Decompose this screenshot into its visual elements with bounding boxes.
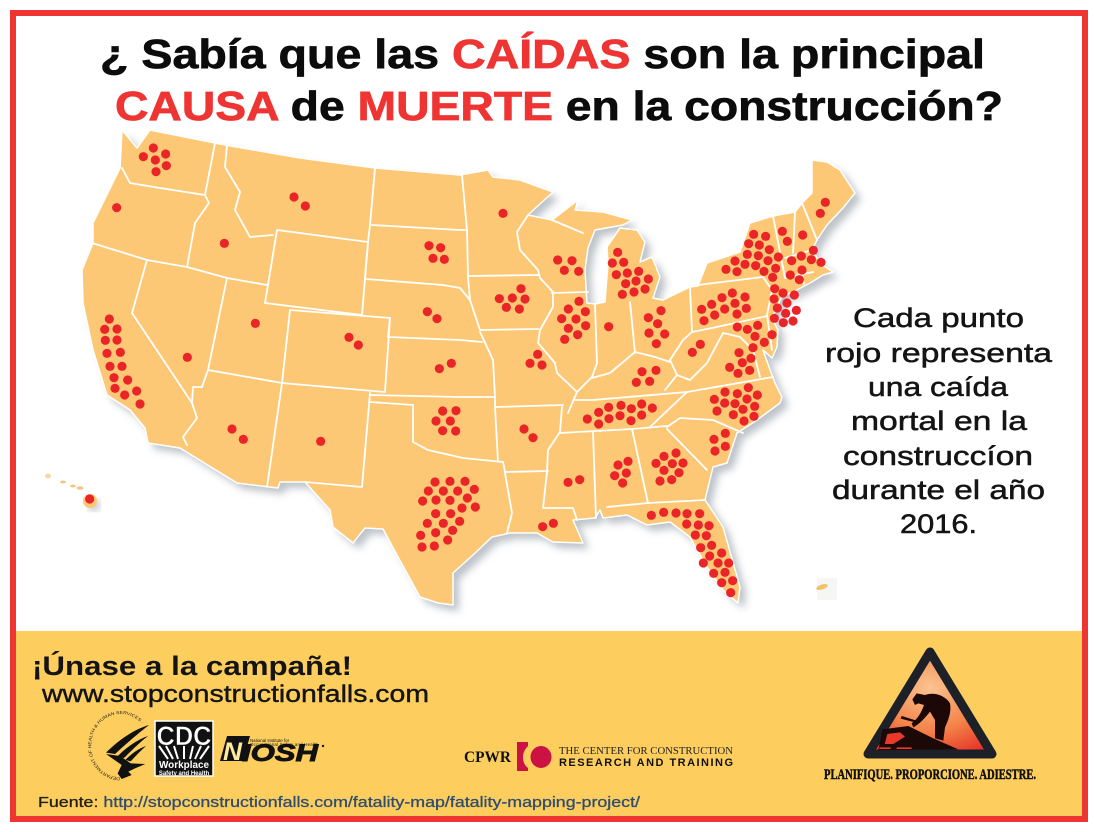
title: ¿ Sabía que las CAÍDAS son la principal [100, 31, 985, 77]
state borders [92, 143, 817, 533]
logo: CDC Workplace Safety and Health: CDC [156, 721, 212, 751]
explanatory text block: rojo representa [825, 338, 1053, 368]
Puerto Rico [816, 578, 837, 600]
icon: warning triangle with worker [868, 652, 992, 754]
title: CAUSA de MUERTE en la construcción? [115, 83, 1003, 129]
explanatory text block: mortal en la [851, 406, 1028, 436]
panel: US map [45, 130, 861, 611]
explanatory text block [825, 303, 1053, 539]
logo: CPWR: THE CENTER FOR CONSTRUCTION [559, 745, 733, 757]
logo: CPWR [464, 742, 733, 771]
source line: Fuente: http://stopconstructionfalls.com/fatality-map/fatality-mapping-project/ [38, 794, 641, 811]
explanatory text block: una caída [868, 372, 1009, 402]
campaign heading: ¡Únase a la campaña! [32, 650, 352, 681]
logo: NIOSH: National Institute for [250, 738, 290, 743]
title [100, 31, 1003, 129]
logo: CPWR: CPWR [464, 749, 511, 766]
fatality dots: west [100, 143, 456, 409]
explanatory text block: Cada punto [853, 303, 1024, 333]
campaign website: www.stopconstructionfalls.com [41, 681, 429, 708]
logo: NIOSH: Occupational Safety and Health [250, 742, 319, 747]
explanatory text block: 2016. [900, 509, 977, 539]
logo: NIOSH [220, 736, 324, 767]
fatality dots: south [424, 406, 737, 597]
logo: NIOSH: N [223, 738, 243, 766]
logo: HHS eagle seal: DEPARTMENT OF HEALTH & HUMAN SERVICES · USA [88, 711, 143, 780]
logo: CDC Workplace Safety and Health: Workplace [159, 760, 209, 771]
logo: CDC Workplace Safety and Health: Safety and Health [159, 771, 210, 777]
panel: footer band [16, 631, 1082, 816]
fatality dots: midwest and northeast [495, 198, 830, 442]
explanatory text block: construccíon [843, 441, 1033, 471]
Hawaii islands [45, 474, 100, 511]
fatality dots: southwest and Hawaii [85, 424, 432, 552]
logo: NIOSH: IOSH [242, 740, 319, 767]
logo: CPWR: RESEARCH AND TRAINING [559, 757, 733, 769]
logo: CDC Workplace Safety and Health [155, 721, 213, 777]
explanatory text block: durante el año [832, 475, 1045, 505]
logo: HHS eagle seal [88, 711, 149, 780]
worker and roof silhouette [878, 693, 958, 750]
